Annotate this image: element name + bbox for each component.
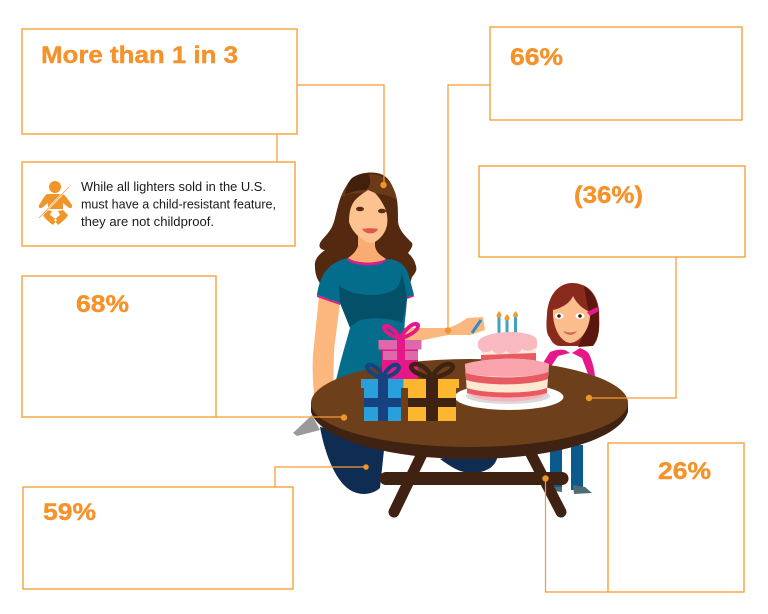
panel: more than 1 in 3: More than 1 in 3 [41,42,238,69]
illustration: woman [293,172,498,494]
table legs [394,452,561,512]
panel: 59%: 59% [43,499,96,526]
connector lines [216,85,676,592]
teal dress [317,258,414,380]
table [311,359,628,512]
table top [311,359,628,447]
collar and cuffs [347,258,386,265]
panel: 26% [608,443,744,592]
shoes [553,485,592,494]
jeans [320,427,390,494]
birthday cake [465,311,549,401]
lighter [472,320,481,333]
dress shadow [339,268,407,327]
gift: pink [378,324,422,379]
arms [313,297,340,410]
panel: 36%: (36%) [574,182,643,209]
panel: 66%: 66% [510,44,563,71]
gift: yellow [404,364,459,421]
face [553,296,590,343]
hair clip [587,307,599,316]
note text: must have a child-resistant feature, [81,196,276,212]
face [349,190,387,243]
panel: 59% [23,487,293,589]
shirt [544,352,596,380]
eyes and mouth [356,207,386,234]
panel: 66% [490,27,742,120]
panel: childproof note [22,162,295,246]
note text: they are not childproof. [81,214,214,229]
icon: crossed-out baby [39,181,72,225]
panel: 36% [479,166,745,257]
note text: While all lighters sold in the U.S. [81,179,266,194]
shoe [293,415,320,436]
plate [454,384,564,410]
hair highlight [341,174,397,200]
hair [546,283,599,346]
lower tier [465,359,549,400]
illustration: girl [543,283,599,494]
upper tier [481,345,536,365]
neck [348,236,386,263]
panel: 68% [22,276,216,417]
gift: blue [361,365,404,421]
eyes and mouth [554,313,584,335]
table edge [311,403,628,459]
candles [496,311,518,338]
legs [550,445,583,490]
cake shadow [466,388,550,404]
panel: 26%: 26% [658,458,711,485]
panel: more than 1 in 3 [22,29,297,134]
panel: 68%: 68% [76,291,129,318]
hair [315,172,416,300]
